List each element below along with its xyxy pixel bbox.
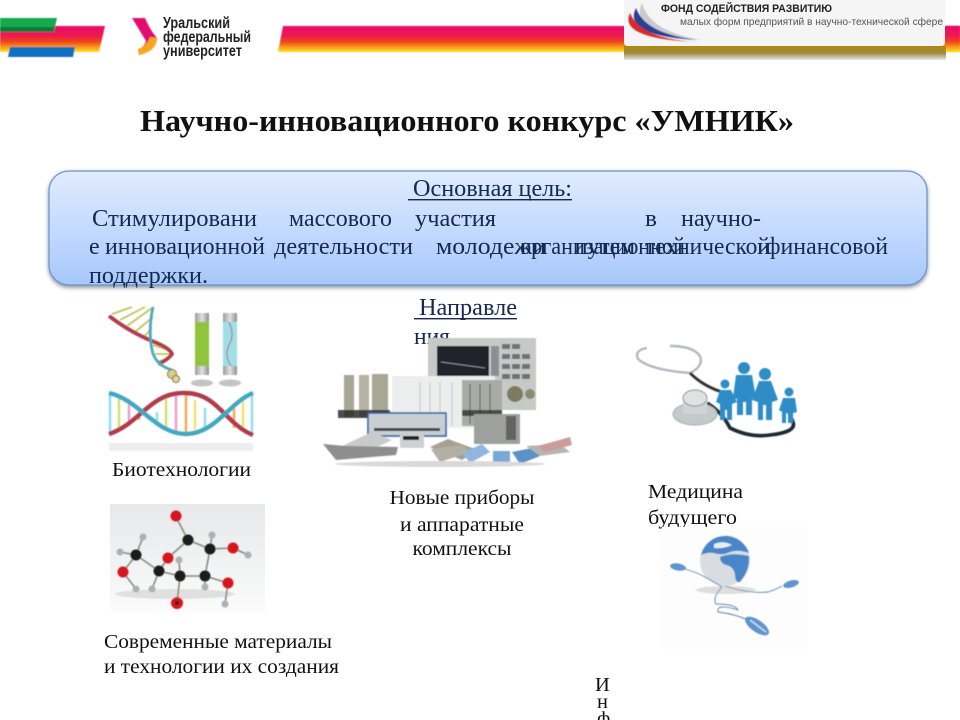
label: medicine of the future: Медицина (648, 481, 743, 503)
text block: goal description: молодежи (436, 234, 546, 260)
panel: main goal (49, 171, 927, 289)
header: right colour bar (278, 26, 960, 52)
label: medicine of the future (648, 481, 743, 529)
chassis (392, 376, 502, 428)
text block: goal description (89, 206, 888, 289)
header: left colour stripes (0, 18, 105, 57)
label: information technology (cut off, vertical): н (597, 691, 608, 713)
logo text: федеральный (163, 29, 251, 46)
heading: directions: ния (414, 324, 450, 350)
heading: main goal: Основная цель: (413, 176, 572, 202)
label: new instruments: Новые приборы (390, 487, 535, 509)
logo text: университет (163, 43, 242, 60)
analyzer (428, 338, 536, 410)
icon: molecule (110, 504, 265, 612)
label: modern materials: Современные материалы (104, 631, 332, 653)
DNA double helix (109, 393, 253, 451)
logo text (163, 15, 251, 60)
text block: goal description: организационной (520, 234, 685, 260)
text block: goal description: участия (415, 206, 496, 232)
text block: goal description: в (645, 206, 657, 232)
label: new instruments: и аппаратные (400, 514, 524, 536)
title: Научно-инновационного конкурс «УМНИК» (140, 103, 794, 138)
fund subtitle: малых форм предприятий в научно-технической сфере (680, 16, 943, 28)
label: medicine of the future: будущего (648, 507, 737, 529)
icon: globe with computer mice (662, 527, 808, 649)
text block: goal description: путем (575, 234, 635, 260)
text block: goal description: технической (645, 234, 770, 260)
label: modern materials (104, 631, 340, 678)
logo: Ural Federal University (132, 15, 251, 60)
icon: letter U mark (132, 18, 157, 55)
right bar end (946, 26, 960, 52)
icon: DNA and test tubes (109, 307, 253, 451)
text block: goal description: и (757, 234, 771, 260)
icon: instruments and hardware (323, 338, 572, 467)
stethoscope (637, 346, 794, 436)
modules (323, 414, 572, 464)
label: information technology (cut off, vertical): И (595, 674, 610, 696)
text block: goal description: е (89, 234, 100, 260)
fund logo banner (624, 0, 946, 60)
icon: stethoscope and family (637, 346, 797, 436)
test tubes (191, 313, 241, 386)
globe continent (720, 554, 749, 582)
DNA strand top (109, 307, 180, 382)
label: modern materials: и технологии их создания (104, 656, 340, 678)
text block: goal description: Стимулировани (92, 206, 257, 232)
text block: goal description: научно- (681, 206, 761, 232)
logo text: Уральский (163, 15, 230, 32)
heading: directions: Направле (419, 295, 517, 321)
label: new instruments: комплексы (412, 538, 512, 560)
plug-in cards (338, 374, 390, 418)
text block: goal description: инновационной (105, 234, 265, 260)
label: information technology (cut off, vertical) (595, 674, 610, 720)
label: biotechnology: Биотехнологии (112, 459, 251, 481)
text block: goal description: финансовой (765, 234, 888, 260)
heading: directions (414, 295, 517, 350)
text block: goal description: деятельности (274, 234, 413, 260)
icon: tricolour swoosh (628, 3, 702, 42)
family figures (716, 362, 797, 423)
rack (368, 413, 446, 436)
fund name: ФОНД СОДЕЙСТВИЯ РАЗВИТИЮ (661, 2, 832, 15)
text block: goal description: массового (289, 206, 392, 232)
globe ocean cap (701, 536, 749, 555)
text block: goal description: поддержки. (89, 263, 208, 289)
label: new instruments (390, 487, 535, 560)
